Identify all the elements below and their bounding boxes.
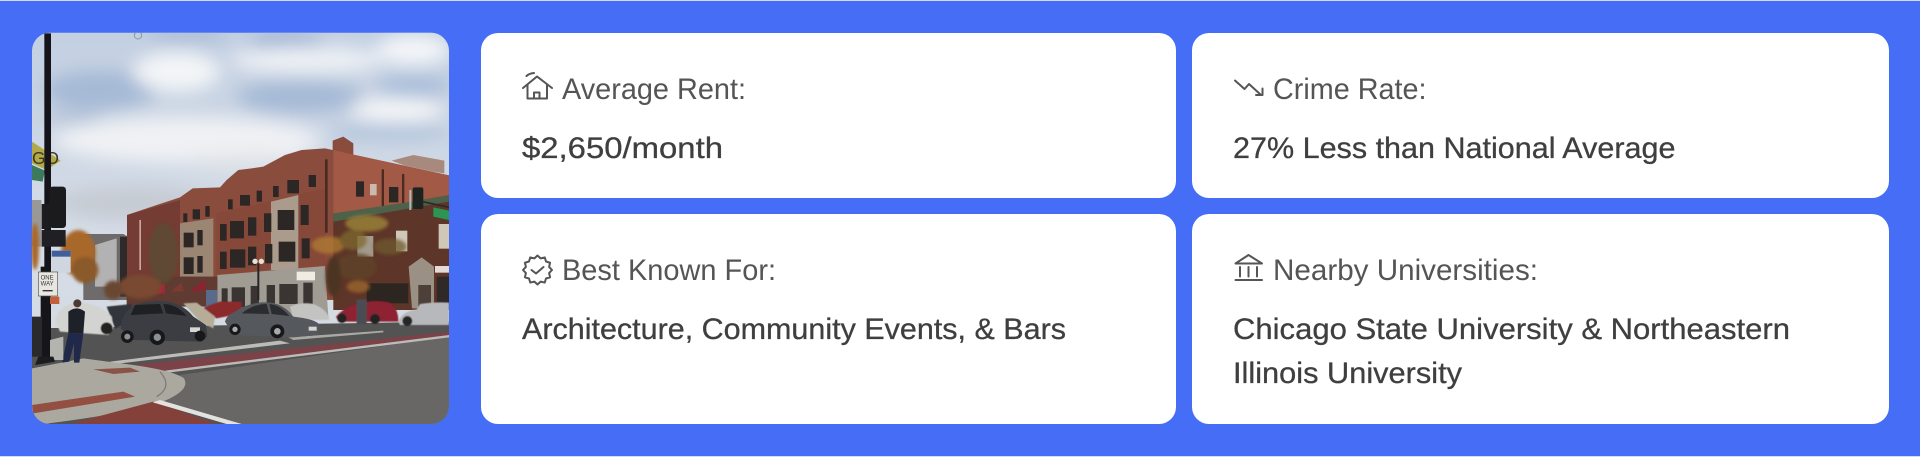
distant buildings	[83, 234, 127, 300]
road and sidewalks	[32, 322, 449, 424]
value: universities: Illinois University	[1233, 357, 1462, 390]
icon: house	[523, 73, 552, 98]
icon: university building	[1236, 255, 1262, 280]
sign, pole and traffic lights: ONE	[41, 275, 54, 281]
label: crime rate: Crime Rate:	[1273, 73, 1426, 106]
icon: trending down	[1235, 80, 1262, 95]
value: universities	[1233, 313, 1790, 390]
value: universities: Chicago State University & Northeastern	[1233, 313, 1790, 346]
right low building	[333, 196, 449, 310]
label: average rent: Average Rent:	[562, 73, 746, 106]
label: best known for: Best Known For:	[562, 254, 776, 287]
grey sedan	[225, 302, 319, 338]
sign, pole and traffic lights	[32, 32, 449, 365]
icon: verified badge	[523, 256, 552, 284]
photo: street corner with brick buildings	[31, 28, 450, 424]
label: nearby universities: Nearby Universities:	[1273, 254, 1538, 287]
card: average rent	[481, 33, 1176, 198]
lamp post	[257, 263, 259, 300]
value: best known for: Architecture, Community Events, & Bars	[522, 313, 1066, 346]
windows	[183, 175, 398, 274]
trees	[31, 215, 407, 299]
main building	[127, 137, 449, 300]
shopfront	[217, 266, 328, 317]
card: nearby universities	[1192, 214, 1889, 424]
pedestrian	[62, 299, 85, 363]
card: best known for	[481, 214, 1176, 424]
value: rent: $2,650/month	[522, 132, 723, 165]
parked cars	[55, 299, 449, 335]
card: crime rate	[1192, 33, 1889, 198]
sign, pole and traffic lights: GO	[32, 148, 59, 168]
dark SUV	[121, 301, 207, 345]
sign, pole and traffic lights: WAY	[41, 281, 54, 287]
value: crime rate: 27% Less than National Average	[1233, 132, 1676, 165]
